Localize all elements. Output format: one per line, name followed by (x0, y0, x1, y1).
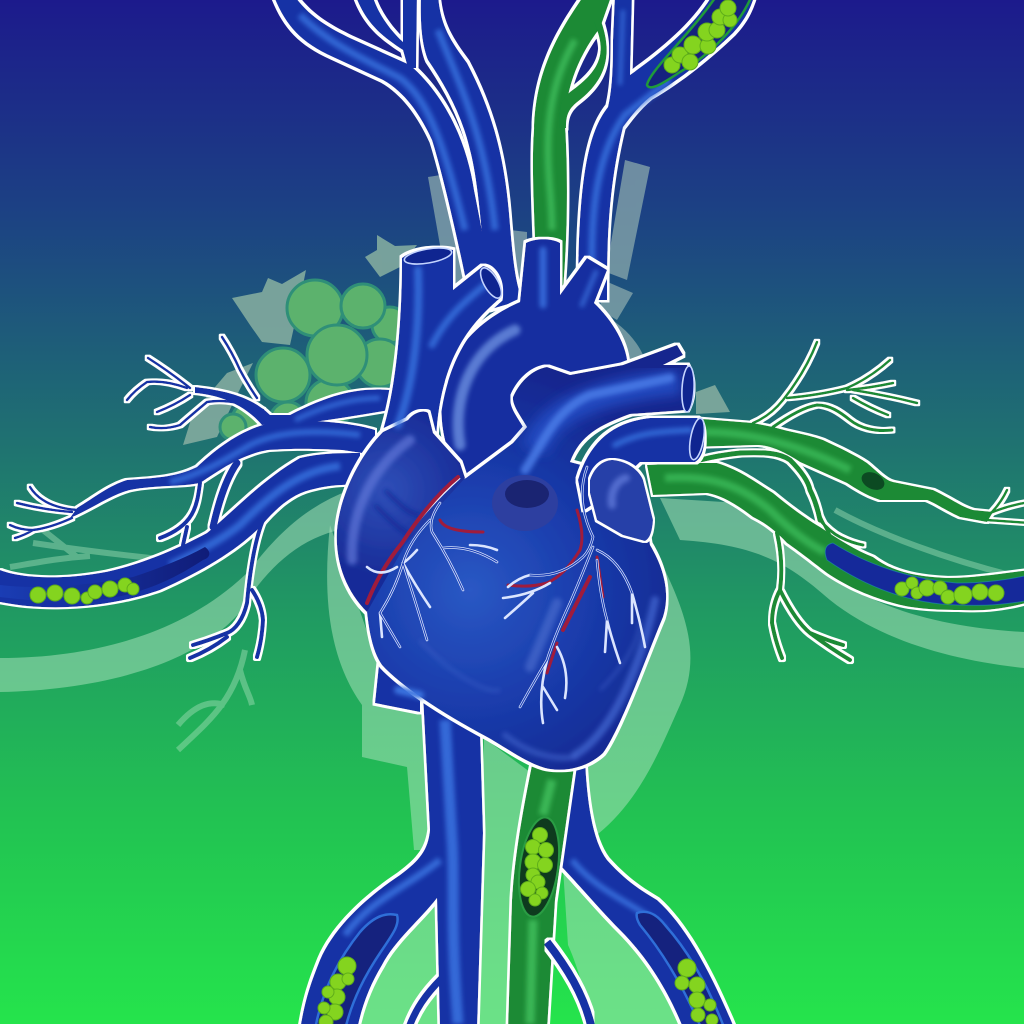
vessel highlights: upper (300, 10, 670, 280)
ghost: broad arteries (0, 490, 1024, 1024)
vessel: upper right blue tree (578, 0, 755, 300)
vessel: top middle branches (355, 0, 417, 68)
vessels: upper blue left tree (273, 0, 522, 310)
heart: coronary vessels left (367, 477, 497, 647)
heart: central ring (492, 475, 558, 531)
vessel: small twig left (408, 978, 442, 1024)
heart: left auricle (590, 460, 653, 541)
vessel: lower green trunk (508, 760, 575, 1024)
heart: right atrium (337, 411, 465, 612)
heart: ventricle body (367, 345, 693, 770)
ghost: leaves (183, 235, 730, 445)
heart: coronary vessels right (503, 467, 645, 723)
heart: pulmonary artery body tone (535, 382, 680, 450)
coronary blue core right (520, 467, 632, 707)
coronary red right (508, 510, 603, 673)
heart: gloss highlights (352, 250, 690, 758)
vessel lumen: lower green with cells (513, 815, 565, 919)
vessel: left lower trunk (0, 453, 360, 607)
heart (337, 239, 707, 770)
vessels: left tree (0, 337, 390, 658)
vessel: upper green trunk (533, 0, 612, 300)
vessels: lower blue central tree (300, 695, 483, 1024)
vessel highlights: lower (345, 720, 665, 1024)
vessel: second trunk (421, 0, 522, 310)
coronary white right (503, 467, 645, 723)
vessel lumen: lower right with cells (637, 912, 725, 1024)
coronary red left (367, 477, 483, 603)
vessel: left mid trunk (70, 421, 375, 518)
vessel lumen: lower left with cells (315, 914, 398, 1024)
vessel: right twigs (700, 342, 1024, 660)
heart: superior vena cava and branch (370, 248, 501, 480)
vessel lumen: left with cells (0, 547, 209, 604)
heart: ventricles, pulmonary artery and right atrium (337, 345, 693, 770)
vessel: main left branch (273, 0, 490, 300)
vessel highlights: right (665, 432, 850, 552)
heart: lower pulmonary tube (578, 418, 704, 510)
vessel: lower twig right (547, 942, 592, 1024)
coronary blue core left (380, 503, 497, 647)
vessel: right upper trunk (690, 418, 993, 522)
vessels: lower blue right branch (555, 760, 735, 1024)
vessel: right lower trunk (647, 463, 1024, 610)
vessel: left top trunk (195, 387, 390, 425)
heart: atrium partial edge (405, 478, 460, 538)
heart: tube openings (403, 245, 707, 461)
vessel highlights: left (170, 398, 380, 565)
heart: aortic arch (441, 239, 628, 478)
heart: inferior vena cava stub (375, 655, 420, 712)
coronary white left (367, 503, 497, 647)
ghost: top tubes (428, 160, 650, 370)
vessels: right tree (647, 342, 1024, 660)
vessel lumen: right with cells (825, 469, 1024, 605)
ghost: grapes (220, 280, 408, 440)
vessel lumen: upper right with cells (647, 0, 752, 87)
vessel: left twigs (10, 337, 263, 658)
ghost: thin twigs (10, 510, 1010, 750)
heart: subtle fold shading (375, 490, 640, 691)
